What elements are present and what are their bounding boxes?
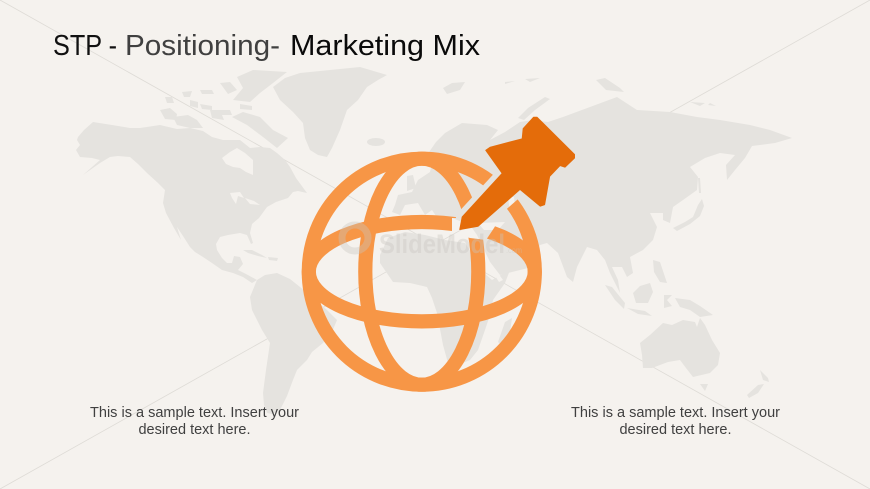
world map [76,67,792,414]
title: Positioning- [125,30,280,62]
text block: right [571,405,780,438]
icon: globe [309,159,535,385]
watermark: .com [506,245,522,255]
title: STP - [53,30,117,62]
title: Marketing Mix [290,30,481,62]
text block: right: This is a sample text. Insert your [571,405,780,421]
Caribbean islands [243,250,278,261]
Tasmania [700,384,708,391]
watermark: SlideModel [379,229,505,259]
New Zealand [747,370,769,398]
watermark [342,225,522,259]
Africa [380,232,510,365]
text block: left: desired text here. [138,422,250,438]
text block: left [90,405,299,438]
Arctic Russia islands [443,78,716,106]
Japan and Sakhalin [673,178,704,231]
South America [250,273,337,414]
Australia [640,318,720,377]
Eurasia [392,97,792,293]
icon: push pin [460,117,574,230]
British Isles [407,175,416,191]
title [53,30,481,62]
Greenland [273,67,387,157]
North America [76,122,307,283]
Southeast Asia islands [605,260,713,317]
Novaya Zemlya [518,97,550,120]
Arctic islands [160,70,288,148]
Iceland [367,138,385,146]
text block: right: desired text here. [620,422,732,438]
text block: left: This is a sample text. Insert your [90,405,299,421]
inland water [222,148,260,205]
Madagascar [498,318,512,347]
